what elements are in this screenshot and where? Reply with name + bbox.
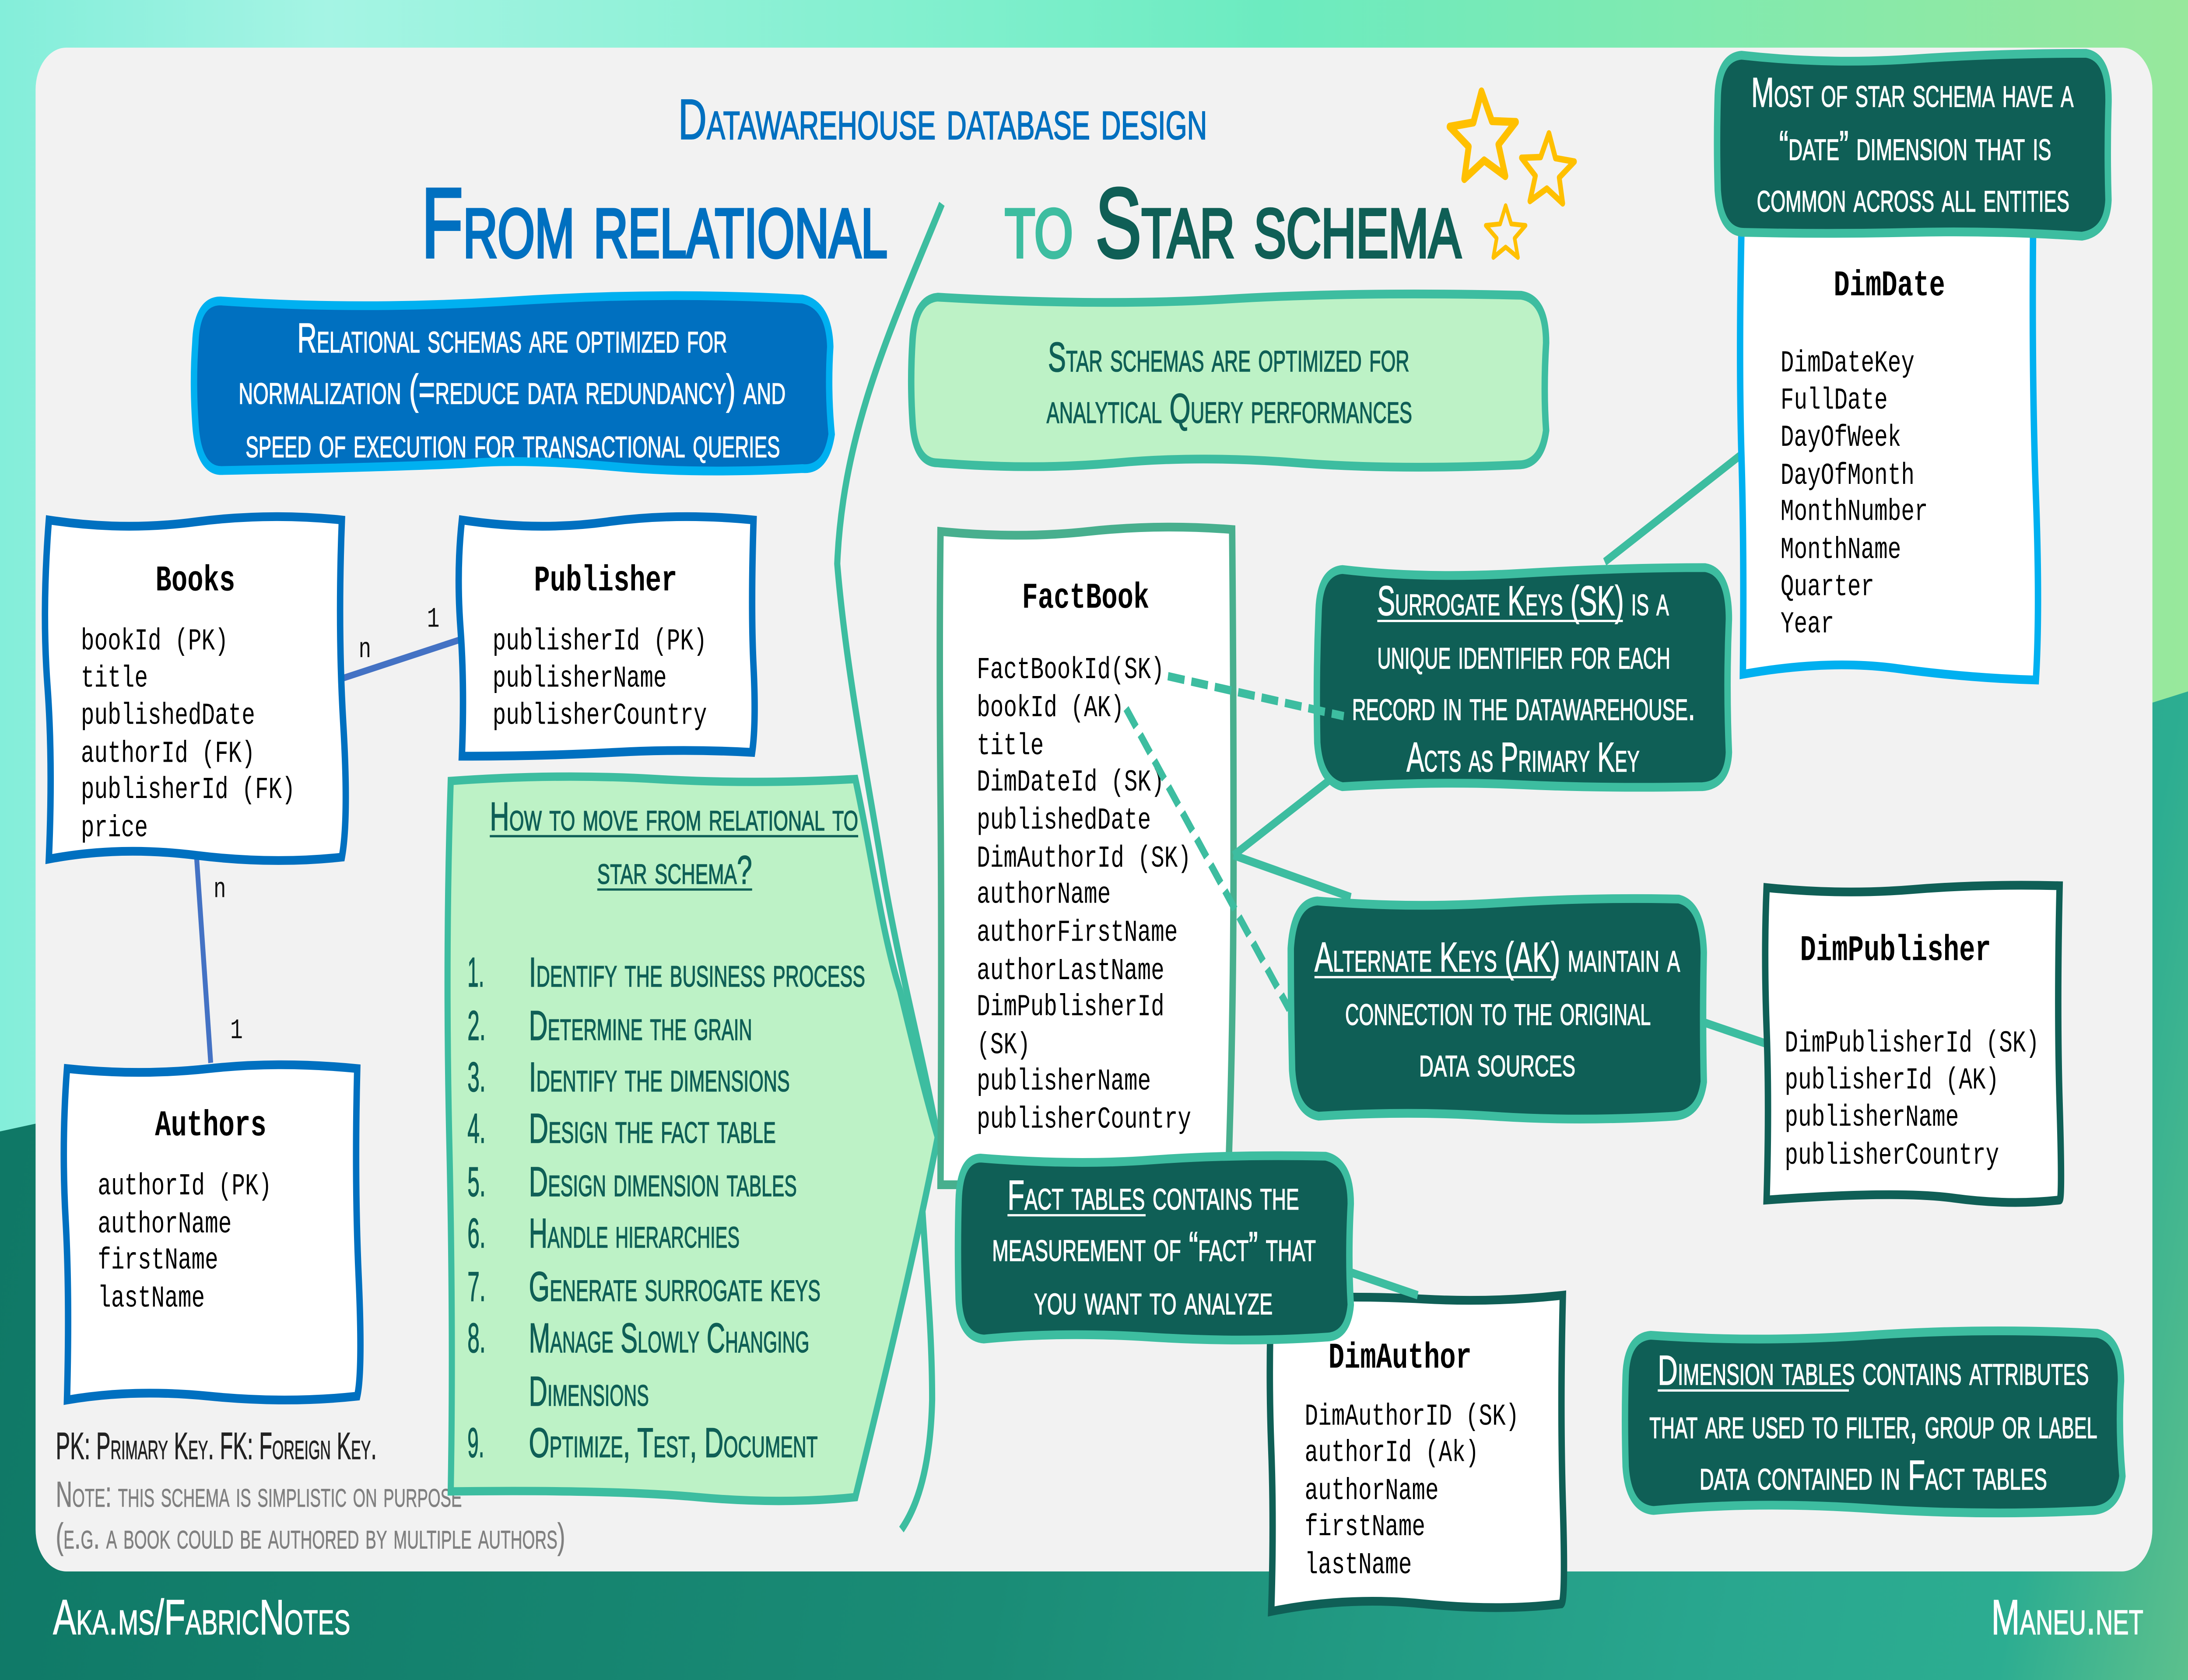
callout: star schemas: Star schemas are optimized for xyxy=(1048,333,1410,381)
table: Publisher: publisherName xyxy=(493,662,667,696)
table: Publisher: publisherId (PK) xyxy=(493,625,707,659)
table: Authors: Authors xyxy=(155,1105,266,1146)
numbered list of steps: Design dimension tables xyxy=(529,1158,797,1205)
dashed connector: alternate key field xyxy=(1126,709,1289,1009)
callout: fact tables xyxy=(958,1156,1351,1340)
table: FactBook: title xyxy=(977,729,1044,764)
note: schema simplification: (e.g. a book could be authored by multiple authors) xyxy=(56,1516,565,1557)
table: DimDate: DayOfWeek xyxy=(1781,421,1901,455)
table: Publisher: Publisher xyxy=(534,560,677,602)
table: DimDate xyxy=(1740,228,2038,680)
table: FactBook: DimAuthorId (SK) xyxy=(977,842,1191,876)
table: DimDate: DimDateKey xyxy=(1781,346,1914,381)
connector: factbook to alternate keys xyxy=(1234,855,1351,897)
dashed connector: surrogate key field xyxy=(1168,676,1344,716)
title: from relational: From relational xyxy=(421,168,887,279)
table: FactBook: DimDateId (SK) xyxy=(977,766,1164,800)
callout: fact tables: measurement of “fact” that xyxy=(992,1223,1316,1270)
table: Books: publisherId (FK) xyxy=(81,773,295,808)
numbered list of steps: 9. xyxy=(467,1419,484,1466)
callout: fact tables: you want to analyze xyxy=(1034,1276,1273,1323)
table: FactBook: publisherCountry xyxy=(977,1102,1191,1137)
callout: surrogate keys: unique identifier for each xyxy=(1377,630,1670,678)
title: to star schema: to xyxy=(1005,168,1073,279)
connector: alternate keys to dimpublisher xyxy=(1705,1023,1767,1044)
table: FactBook: FactBookId(SK) xyxy=(977,653,1164,688)
panel: how to move from relational to star schema xyxy=(448,777,938,1501)
callout: star schemas xyxy=(911,294,1546,467)
callout: surrogate keys: record in the datawarehouse. xyxy=(1352,682,1695,729)
table: FactBook: DimPublisherId xyxy=(977,990,1164,1025)
callout: surrogate keys: Surrogate Keys (SK) is a xyxy=(1377,578,1669,624)
numbered list of steps: 1. xyxy=(467,949,484,996)
table: Books: Books xyxy=(156,560,235,602)
table: FactBook: (SK) xyxy=(977,1029,1031,1063)
table: DimAuthor xyxy=(1270,1295,1564,1611)
connector: fact tables to dimauthor xyxy=(1351,1272,1418,1295)
table: FactBook: publishedDate xyxy=(977,804,1151,838)
numbered list of steps: 6. xyxy=(467,1210,486,1256)
subtitle: datawarehouse database design: Datawarehouse database design xyxy=(678,88,1207,151)
callout: fact tables: Fact tables contains the xyxy=(1007,1172,1299,1218)
numbered list of steps: Generate surrogate keys xyxy=(529,1263,820,1310)
table: FactBook: bookId (AK) xyxy=(977,691,1124,726)
panel: how to move from relational to star schema: star schema? xyxy=(597,847,752,892)
table: Authors xyxy=(64,1065,361,1400)
table: Publisher xyxy=(459,517,754,756)
relationship line: books to authors: n xyxy=(214,874,226,906)
numbered list of steps: Identify the dimensions xyxy=(529,1054,790,1100)
connector: surrogate keys to dimdate xyxy=(1605,453,1743,562)
relationship line: books to authors: 1 xyxy=(230,1015,243,1047)
relationship line: books to publisher: n xyxy=(359,634,371,666)
table: FactBook xyxy=(940,527,1234,1185)
table: Books: price xyxy=(81,811,148,846)
relationship line: books to authors xyxy=(196,850,243,1063)
callout: alternate keys: Alternate Keys (AK) maintain a xyxy=(1315,934,1680,980)
table: Books: publishedDate xyxy=(81,699,255,733)
numbered list of steps: Determine the grain xyxy=(529,1002,752,1049)
table: FactBook: authorName xyxy=(977,878,1111,912)
numbered list of steps: Optimize, Test, Document xyxy=(529,1419,818,1466)
connector: factbook to surrogate keys xyxy=(1234,781,1329,855)
table: DimPublisher: DimPublisher xyxy=(1800,930,1991,971)
callout: alternate keys xyxy=(1291,899,1704,1119)
numbered list of steps: Handle hierarchies xyxy=(529,1210,740,1256)
table: DimDate: MonthName xyxy=(1781,533,1901,567)
numbered list of steps: 2. xyxy=(467,1002,486,1049)
numbered list of steps: 3. xyxy=(467,1054,486,1100)
table: Authors: authorId (PK) xyxy=(98,1169,272,1204)
numbered list of steps: 4. xyxy=(467,1105,486,1152)
table: FactBook: authorLastName xyxy=(977,954,1164,989)
callout: date dimension xyxy=(1717,53,2108,236)
table: DimPublisher: publisherCountry xyxy=(1785,1139,1999,1173)
table: FactBook: publisherName xyxy=(977,1064,1151,1099)
numbered list of steps: 7. xyxy=(467,1263,486,1310)
callout: dimension tables: data contained in Fact tables xyxy=(1700,1452,2047,1498)
callout: dimension tables xyxy=(1625,1331,2122,1513)
table: DimAuthor: authorName xyxy=(1305,1474,1439,1508)
callout: date dimension: Most of star schema have a xyxy=(1751,69,2074,116)
table: Authors: firstName xyxy=(98,1244,218,1278)
table: FactBook: FactBook xyxy=(1022,578,1149,619)
icon: three stars xyxy=(1448,89,1575,257)
table: DimDate: DimDate xyxy=(1834,265,1945,306)
table: Publisher: publisherCountry xyxy=(493,699,707,733)
footer: left link: Aka.ms/FabricNotes xyxy=(53,1590,350,1645)
callout: relational schemas: normalization (=reduce data redundancy) and xyxy=(238,366,785,413)
relationship line: books to publisher xyxy=(343,603,459,678)
table: Books: bookId (PK) xyxy=(81,625,228,659)
numbered list of steps: Manage Slowly Changing xyxy=(529,1314,809,1362)
title: to star schema: Star schema xyxy=(1095,168,1461,279)
table: DimPublisher xyxy=(1765,885,2061,1202)
callout: date dimension: “date” dimension that is xyxy=(1779,122,2051,169)
table: Books: authorId (FK) xyxy=(81,737,255,771)
callout: alternate keys: connection to the original xyxy=(1345,987,1651,1034)
legend: primary and foreign key: PK: Primary Key. FK: Foreign Key. xyxy=(56,1425,377,1467)
table: DimDate: MonthNumber xyxy=(1781,495,1928,529)
callout: date dimension: common across all entities xyxy=(1757,174,2069,220)
callout: alternate keys: data sources xyxy=(1419,1038,1575,1085)
table: Authors: authorName xyxy=(98,1208,231,1242)
table: Authors: lastName xyxy=(98,1282,205,1316)
table: DimPublisher: DimPublisherId (SK) xyxy=(1785,1026,2039,1061)
divider curve: relational to star xyxy=(837,204,942,1530)
callout: surrogate keys: Acts as Primary Key xyxy=(1406,734,1640,780)
table: DimDate: DayOfMonth xyxy=(1781,459,1914,494)
numbered list of steps: 8. xyxy=(467,1314,486,1362)
table: DimDate: Year xyxy=(1781,607,1834,642)
callout: relational schemas: Relational schemas are optimized for xyxy=(297,315,727,361)
table: DimPublisher: publisherName xyxy=(1785,1101,1959,1135)
table: DimAuthor: DimAuthor xyxy=(1329,1338,1472,1379)
note: schema simplification xyxy=(56,1474,565,1557)
callout: relational schemas: speed of execution for transactional queries xyxy=(245,419,780,466)
numbered list of steps: Identify the business process xyxy=(529,949,865,996)
numbered list of steps xyxy=(467,949,865,1466)
callout: relational schemas xyxy=(194,296,832,471)
callout: dimension tables: that are used to filter, group or label xyxy=(1649,1400,2097,1447)
table: FactBook: authorFirstName xyxy=(977,916,1178,950)
numbered list of steps: 5. xyxy=(467,1158,486,1205)
callout: dimension tables: Dimension tables contains attributes xyxy=(1658,1347,2089,1394)
callout: star schemas: analytical Query performances xyxy=(1047,385,1412,432)
table: Books: title xyxy=(81,662,148,696)
note: schema simplification: Note: this schema is simplistic on purpose xyxy=(56,1474,462,1515)
table: DimAuthor: DimAuthorID (SK) xyxy=(1305,1400,1519,1434)
table: DimDate: Quarter xyxy=(1781,570,1874,605)
panel: how to move from relational to star schema: How to move from relational to xyxy=(490,794,858,839)
numbered list of steps: Design the fact table xyxy=(529,1105,776,1152)
callout: surrogate keys xyxy=(1317,567,1729,788)
numbered list of steps: Dimensions xyxy=(529,1368,649,1415)
table: DimAuthor: lastName xyxy=(1305,1548,1412,1583)
table: DimAuthor: authorId (Ak) xyxy=(1305,1436,1479,1470)
relationship line: books to publisher: 1 xyxy=(427,603,439,636)
table: Books xyxy=(45,517,346,861)
table: DimDate: FullDate xyxy=(1781,384,1888,418)
table: DimAuthor: firstName xyxy=(1305,1510,1425,1545)
table: DimPublisher: publisherId (AK) xyxy=(1785,1064,1999,1098)
footer: right link: Maneu.net xyxy=(1991,1590,2143,1645)
